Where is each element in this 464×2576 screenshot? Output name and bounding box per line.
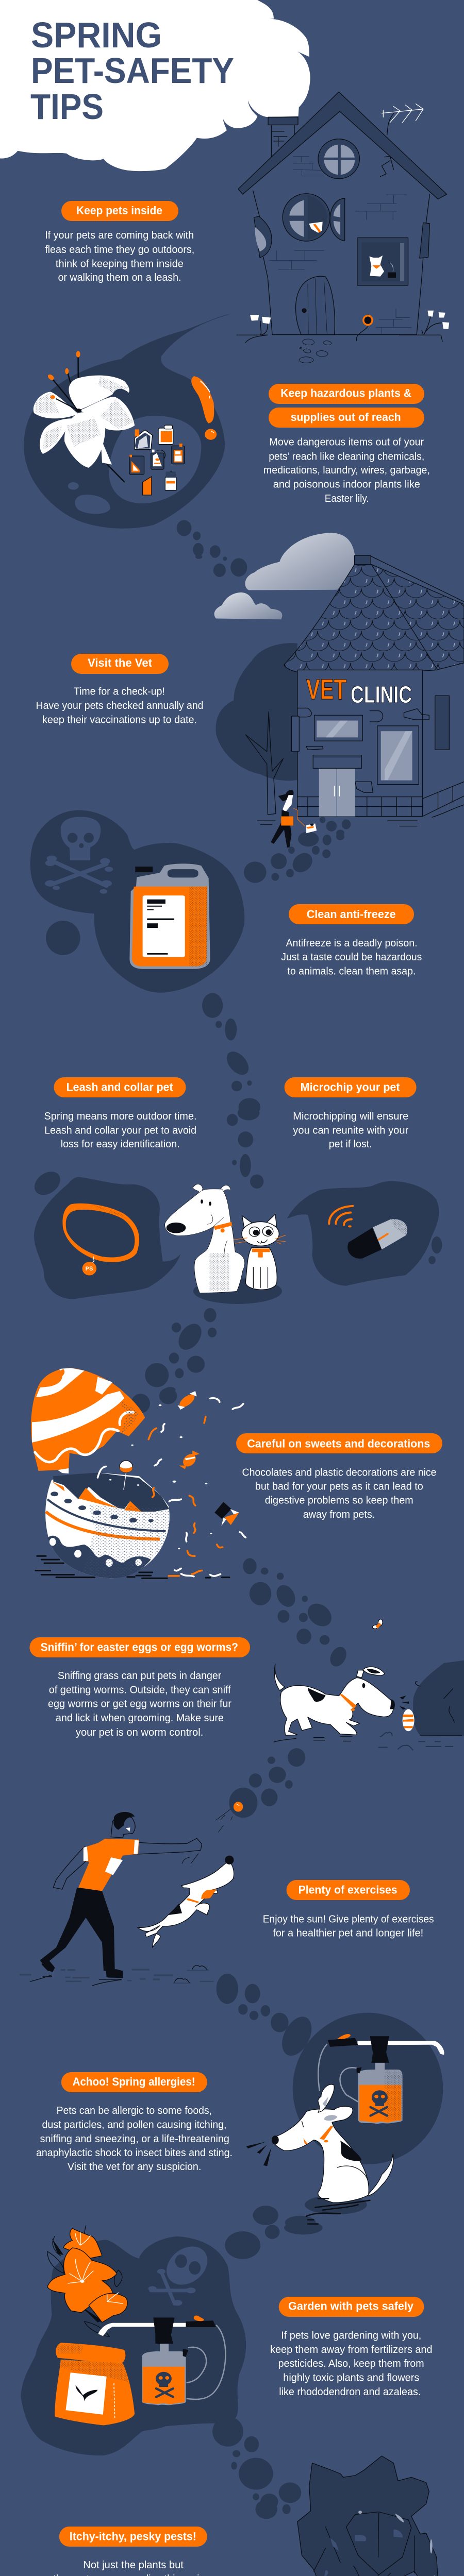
chip blob bbox=[287, 1181, 442, 1286]
dog shadow bbox=[193, 1278, 282, 1304]
paw-print blob trail bbox=[30, 520, 367, 2576]
text: keep hazardous plants: and poisonous indoor plants like bbox=[273, 479, 420, 490]
heading: clean anti-freeze: Clean anti-freeze bbox=[307, 908, 396, 921]
text: keep hazardous plants: medications, laundry, wires, garbage, bbox=[263, 465, 430, 476]
text: plenty of exercises: Enjoy the sun! Give plenty of exercises bbox=[263, 1913, 434, 1925]
illustration: garden chemicals and flowers bbox=[21, 2226, 246, 2455]
text: keep hazardous plants: Move dangerous items out of your bbox=[269, 436, 424, 448]
flowers and leaves bbox=[47, 2226, 127, 2336]
title: PET-SAFETY bbox=[31, 50, 234, 91]
text: keep pets inside: or walking them on a leash. bbox=[58, 272, 181, 283]
text: sniffin: Sniffing grass can put pets in danger bbox=[58, 1670, 222, 1682]
pills: keep hazardous plants bbox=[269, 384, 424, 428]
text: leash and collar: Spring means more outdoor time. bbox=[44, 1111, 197, 1122]
heading: careful on sweets: Careful on sweets and decorations bbox=[247, 1437, 430, 1450]
heading: visit the vet: Visit the Vet bbox=[88, 656, 153, 669]
text: keep hazardous plants bbox=[263, 436, 430, 504]
pill: plenty of exercises bbox=[287, 1880, 410, 1900]
illustration: hazardous plants and supplies bbox=[24, 314, 230, 529]
grass bbox=[379, 1732, 453, 1750]
text: keep pets inside: fleas each time they go outdoors, bbox=[45, 244, 194, 256]
person bbox=[40, 1812, 202, 1978]
illustration: throwing ball with dog bbox=[40, 1812, 234, 1978]
heading: keep hazardous plants: Keep hazardous plants & bbox=[280, 387, 411, 400]
woman walking dog bbox=[257, 790, 464, 848]
illustration: broken easter egg bbox=[31, 1368, 245, 1578]
heading: keep hazardous plants: supplies out of reach bbox=[291, 411, 401, 423]
top eggshell bbox=[31, 1368, 145, 1473]
text: achoo: sniffing and sneezing, or a life-threatening bbox=[40, 2133, 229, 2145]
text: achoo: anaphylactic shock to insect bites and sting. bbox=[36, 2147, 233, 2159]
collar tag text: PS bbox=[86, 1266, 93, 1272]
text: careful on sweets: Chocolates and plastic decorations are nice bbox=[242, 1467, 436, 1478]
heading: sniffin: Sniffin’ for easter eggs or egg worms? bbox=[41, 1640, 238, 1654]
text: keep hazardous plants: Easter lily. bbox=[325, 493, 369, 504]
dark blob bbox=[30, 810, 244, 993]
text: keep pets inside: think of keeping them inside bbox=[56, 258, 184, 269]
text: visit the vet: keep their vaccinations up to date. bbox=[42, 715, 197, 726]
text: garden with pets safely: If pets love gardening with you, bbox=[281, 2330, 421, 2341]
text: achoo: Pets can be allergic to some foods, bbox=[57, 2105, 212, 2116]
fertilizer bag bbox=[55, 2343, 135, 2425]
title: TIPS bbox=[30, 87, 104, 127]
open window with cat bbox=[283, 194, 345, 241]
bricks bbox=[269, 157, 411, 333]
chimney bbox=[268, 117, 298, 160]
text: garden with pets safely: highly toxic plants and flowers bbox=[283, 2372, 419, 2383]
text: achoo: dust particles, and pollen causing itching, bbox=[42, 2119, 227, 2130]
title bbox=[30, 15, 234, 127]
text: clean anti-freeze: Antifreeze is a deadly poison. bbox=[286, 938, 418, 949]
top of egg highlight bbox=[49, 1369, 64, 1381]
small egg bbox=[403, 1709, 415, 1731]
jug bbox=[129, 863, 210, 969]
pill: clean anti-freeze bbox=[289, 904, 414, 924]
text: sniffin: and lick it when grooming. Make sure bbox=[56, 1713, 224, 1724]
sign: vet clinic bbox=[306, 673, 412, 708]
lily bbox=[34, 351, 135, 482]
illustration: potted plant with tick bbox=[259, 2456, 438, 2576]
text: sniffin: your pet is on worm control. bbox=[76, 1727, 203, 1738]
chemical bottles bbox=[129, 425, 185, 495]
text: clean anti-freeze: Just a taste could be hazardous bbox=[281, 952, 422, 963]
text: microchip: pet if lost. bbox=[329, 1139, 372, 1150]
round window bbox=[318, 139, 359, 179]
heading: garden with pets safely: Garden with pets safely bbox=[288, 2300, 414, 2313]
confetti bbox=[97, 1398, 245, 1577]
text: clean anti-freeze bbox=[281, 938, 422, 977]
lower window with dog bbox=[357, 238, 408, 285]
bush bbox=[413, 1660, 464, 1736]
crack bbox=[380, 156, 393, 177]
text: leash and collar: loss for easy identification. bbox=[61, 1139, 180, 1150]
heading: keep pets inside: Keep pets inside bbox=[76, 204, 162, 217]
skull and crossbones bbox=[45, 817, 113, 894]
pill: sniffin bbox=[29, 1637, 250, 1657]
text: sniffin: of getting worms. Outside, they can sniff bbox=[49, 1685, 231, 1696]
collar blob bbox=[34, 1177, 180, 1299]
dark circle bbox=[293, 2013, 443, 2164]
bare tree bbox=[245, 711, 283, 815]
text: keep hazardous plants: pets’ reach like cleaning chemicals, bbox=[269, 451, 424, 462]
sign: vet clinic: VET bbox=[306, 673, 346, 705]
heading: achoo: Achoo! Spring allergies! bbox=[73, 2075, 195, 2088]
pill: keep pets inside bbox=[61, 201, 178, 221]
text: plenty of exercises bbox=[263, 1913, 434, 1939]
illustration: house bbox=[237, 92, 449, 363]
pill: microchip bbox=[285, 1077, 417, 1097]
collar bbox=[62, 1204, 139, 1275]
roof bbox=[284, 555, 464, 672]
text: leash and collar bbox=[44, 1111, 197, 1150]
sitting cat bbox=[234, 1214, 286, 1290]
text: itchy: Not just the plants but bbox=[83, 2560, 184, 2571]
sign: vet clinic: CLINIC bbox=[351, 681, 412, 708]
illustration: vet clinic bbox=[214, 533, 464, 848]
door bbox=[295, 276, 335, 335]
text: achoo: Visit the vet for any suspicion. bbox=[68, 2161, 201, 2173]
side shutters bbox=[254, 216, 429, 258]
heading: plenty of exercises: Plenty of exercises bbox=[299, 1884, 397, 1896]
text: careful on sweets: away from pets. bbox=[303, 1509, 375, 1520]
heading: microchip: Microchip your pet bbox=[301, 1081, 400, 1094]
text: garden with pets safely bbox=[270, 2330, 433, 2398]
front windows bbox=[314, 715, 419, 785]
waffle cone bbox=[214, 1502, 239, 1526]
clouds bbox=[214, 533, 355, 619]
building walls bbox=[297, 670, 464, 817]
butterfly bbox=[372, 1619, 383, 1629]
dark blob with skull bbox=[21, 2236, 246, 2455]
text: visit the vet: Have your pets checked annually and bbox=[36, 700, 203, 711]
illustration: anti-freeze bbox=[30, 810, 244, 993]
text: keep pets inside bbox=[45, 230, 194, 283]
ground bbox=[182, 1854, 198, 1863]
pill: visit the vet bbox=[71, 654, 169, 674]
illustration: sniffing dog bbox=[216, 1619, 464, 1832]
text: sniffin bbox=[48, 1670, 231, 1738]
ground lines bbox=[36, 1556, 229, 1578]
flowers, stones bbox=[237, 311, 449, 363]
sitting dog bbox=[165, 1184, 245, 1293]
pill: garden with pets safely bbox=[279, 2297, 424, 2317]
walls bbox=[253, 191, 429, 335]
title: SPRING bbox=[31, 15, 162, 55]
dark blob bbox=[24, 314, 230, 529]
exclamation mark bbox=[191, 376, 217, 440]
bottom eggshell bbox=[45, 1472, 170, 1578]
text: visit the vet bbox=[36, 686, 203, 726]
roof bbox=[238, 92, 447, 199]
clinic door bbox=[313, 755, 361, 817]
text: microchip: Microchipping will ensure bbox=[293, 1111, 408, 1122]
ground: exercise bbox=[20, 1961, 213, 1986]
heading: keep hazardous plants bbox=[280, 387, 411, 423]
pill: itchy bbox=[59, 2527, 207, 2547]
text: keep pets inside: If your pets are coming back with bbox=[45, 230, 194, 241]
lollipop bbox=[120, 1461, 132, 1489]
jumping dog bbox=[138, 1856, 234, 1947]
text: microchip: you can reunite with your bbox=[293, 1125, 409, 1136]
candies bbox=[176, 1391, 200, 1469]
text: microchip bbox=[293, 1111, 409, 1150]
antenna bbox=[382, 104, 423, 135]
illustration: collar, dog and cat, microchip bbox=[34, 1177, 442, 1304]
monstera plant bbox=[297, 2456, 438, 2576]
text: sniffin: egg worms or get egg worms on their fur bbox=[48, 1699, 231, 1710]
text: achoo bbox=[36, 2105, 233, 2173]
skull bbox=[148, 2244, 214, 2306]
sniffing dog bbox=[274, 1664, 409, 1742]
text: visit the vet: Time for a check-up! bbox=[74, 686, 165, 698]
pesticide sprayer bbox=[318, 2034, 444, 2124]
pill: careful on sweets bbox=[236, 1433, 442, 1453]
ball bbox=[216, 1802, 243, 1832]
heading: leash and collar: Leash and collar pet bbox=[67, 1081, 173, 1094]
pill: leash and collar bbox=[54, 1077, 186, 1097]
pill: achoo bbox=[61, 2072, 207, 2092]
text: leash and collar: Leash and collar your pet to avoid bbox=[44, 1125, 196, 1136]
tree shadow bbox=[216, 643, 297, 781]
illustration: sprayer and sneezing dog bbox=[246, 2013, 444, 2224]
sprayer bbox=[98, 2316, 226, 2405]
text: plenty of exercises: for a healthier pet and longer life! bbox=[273, 1927, 423, 1939]
text: careful on sweets: digestive problems so keep them bbox=[265, 1495, 413, 1506]
microchip bbox=[329, 1206, 407, 1259]
sneezing dog bbox=[246, 2084, 393, 2224]
side panel and bricks bbox=[291, 696, 449, 792]
text: careful on sweets: but bad for your pets as it can lead to bbox=[255, 1481, 423, 1492]
text: clean anti-freeze: to animals. clean them asap. bbox=[287, 965, 416, 977]
text: garden with pets safely: like rhododendron and azaleas. bbox=[279, 2386, 421, 2398]
text: garden with pets safely: keep them away from fertilizers and bbox=[270, 2344, 433, 2355]
text: garden with pets safely: pesticides. Also, keep them from bbox=[278, 2358, 424, 2369]
heading: itchy: Itchy-itchy, pesky pests! bbox=[70, 2530, 196, 2543]
title cloud bbox=[0, 0, 310, 171]
text: careful on sweets bbox=[242, 1467, 436, 1520]
text: itchy bbox=[49, 2560, 217, 2576]
